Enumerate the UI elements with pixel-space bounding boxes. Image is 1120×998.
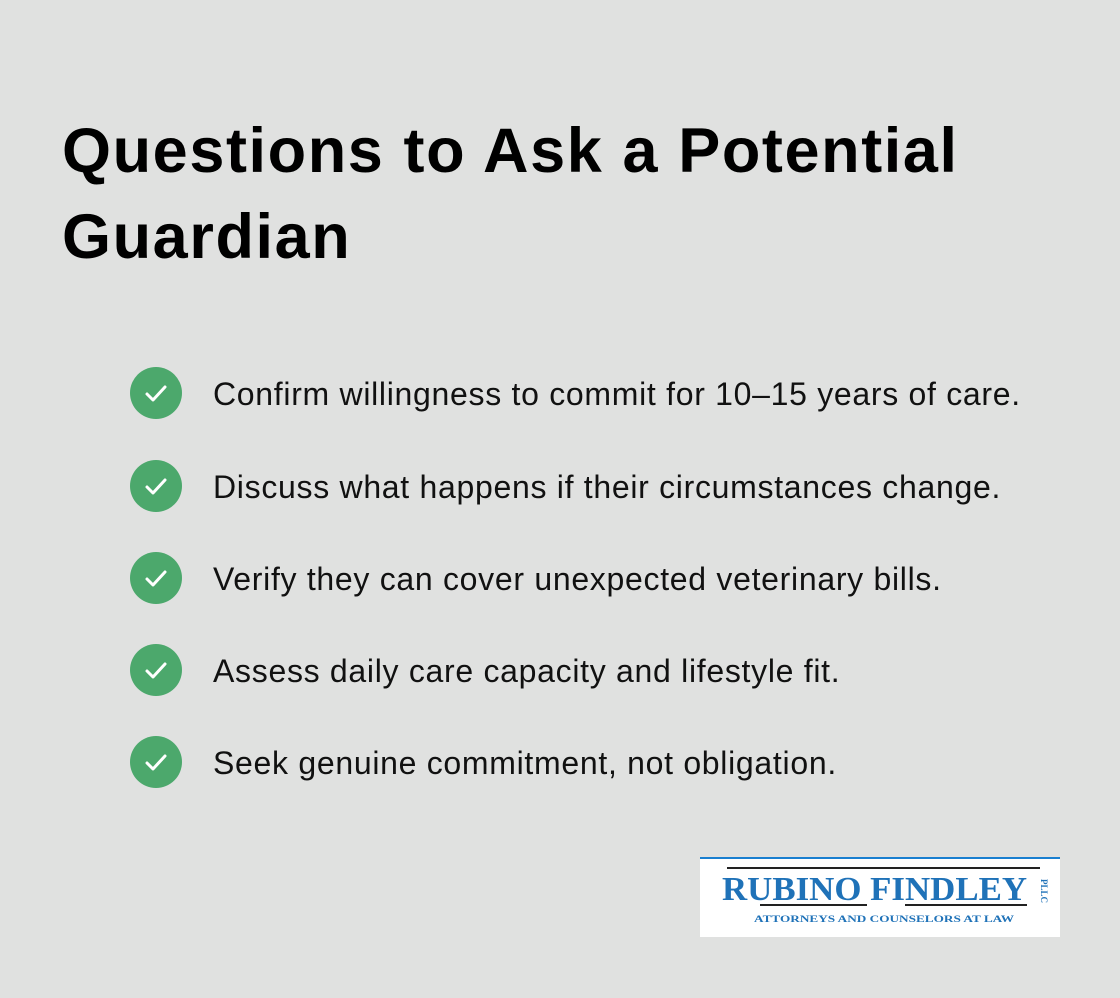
item 1: Confirm willingness to commit for 10–15 years of care. [213,376,1021,412]
logo: PLLC [1039,879,1049,903]
item 5 [130,736,837,788]
icon: check [130,644,182,696]
item 3: Verify they can cover unexpected veterinary bills. [213,561,942,597]
item 1 [130,367,1021,419]
item 4 [130,644,840,696]
logo: RUBINO FINDLEY [722,871,1027,908]
icon: check [130,736,182,788]
icon: check [130,460,182,512]
item 2 [130,460,1001,512]
icon: check [130,552,182,604]
item 2: Discuss what happens if their circumstances change. [213,469,1001,505]
item 4: Assess daily care capacity and lifestyle fit. [213,653,840,689]
logo: ATTORNEYS AND COUNSELORS AT LAW [754,915,1015,925]
icon: check [130,367,182,419]
title: Questions to Ask a Potential [62,116,959,186]
logo [700,857,1060,937]
title: Guardian [62,202,351,272]
item 5: Seek genuine commitment, not obligation. [213,745,837,781]
item 3 [130,552,942,604]
title [62,116,959,272]
